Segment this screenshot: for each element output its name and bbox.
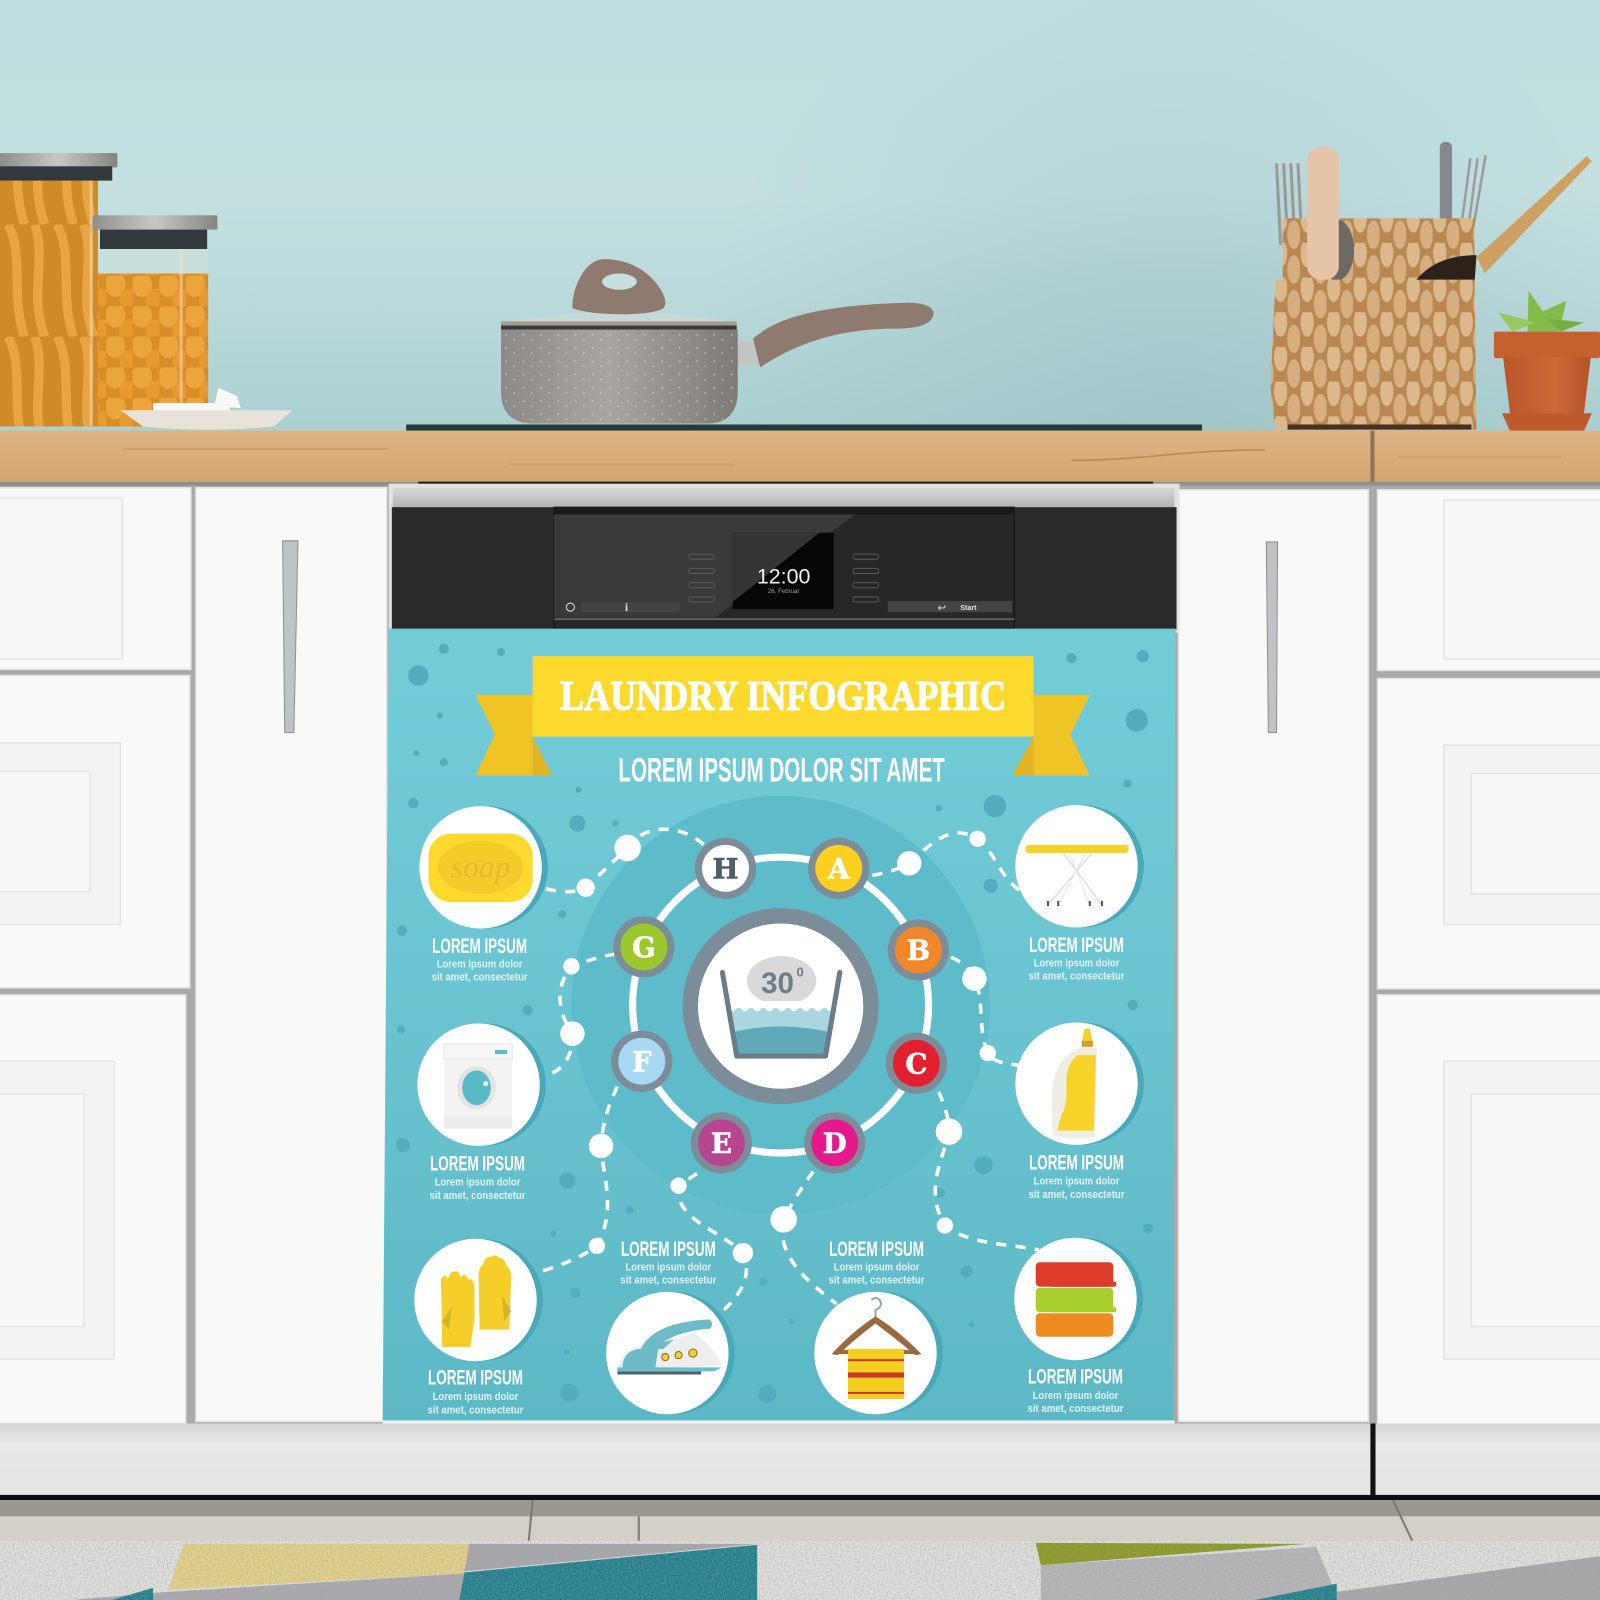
item: clothes iron: LOREM IPSUM [621,1237,716,1261]
item: towel on hanger: LOREM IPSUM [829,1237,924,1261]
dashed connectors [541,829,1039,1311]
item: ironing board: LOREM IPSUM [1029,933,1124,957]
subtitle: LOREM IPSUM DOLOR SIT AMET [618,752,945,790]
jars of pasta [0,153,217,427]
item: towel on hanger: sit amet, consectetur [829,1275,924,1287]
item: washing machine: sit amet, consectetur [430,1190,526,1202]
item: rubber gloves: Lorem ipsum dolor [433,1391,518,1403]
countertop [0,431,1600,488]
node G: G [632,932,656,964]
utensil basket [1270,142,1592,430]
infographic panel [383,629,1176,1423]
background dots [396,644,1153,1403]
item: clothes iron: Lorem ipsum dolor [626,1261,711,1273]
item: washing machine: Lorem ipsum dolor [435,1177,520,1189]
cabinets [0,486,1600,1424]
wash basin [722,972,840,1056]
item: detergent bottle: sit amet, consectetur [1029,1189,1124,1201]
clock display: 12:00 [757,565,811,589]
induction hob [406,424,1202,431]
node C [886,1033,947,1094]
item: towel on hanger [814,1237,943,1414]
wall [0,0,1600,434]
node A [808,838,869,899]
item: folded towels [1014,1238,1143,1415]
connector ring [633,857,929,1153]
potted succulent [1494,291,1600,432]
cabinet handle right [1266,542,1278,733]
connector nodes [560,831,996,1263]
item: folded towels: Lorem ipsum dolor [1033,1390,1118,1402]
floor [0,1500,1600,1543]
item: clothes iron: sit amet, consectetur [620,1275,716,1287]
node B: B [907,935,930,967]
item: washing machine: LOREM IPSUM [430,1151,525,1175]
clock display: 26. Februar [768,588,799,595]
item: folded towels: sit amet, consectetur [1028,1403,1123,1415]
node F: F [632,1046,652,1078]
node D: D [823,1128,847,1160]
title banner [476,656,1090,776]
item: rubber gloves [414,1239,543,1416]
item: soap: soap [451,850,510,885]
temperature badge: 0 [796,965,804,980]
item: ironing board: Lorem ipsum dolor [1034,957,1119,969]
rug [0,1541,1600,1600]
item: washing machine [417,1023,546,1202]
node A: A [827,854,850,886]
letter nodes [611,838,949,1173]
node C: C [905,1048,927,1080]
node G [613,916,674,978]
item: folded towels: LOREM IPSUM [1028,1365,1123,1389]
dishwasher control panel [389,484,1180,633]
clock display [733,533,834,609]
node E: E [711,1128,732,1160]
node B [888,919,949,981]
item: detergent bottle: Lorem ipsum dolor [1034,1176,1119,1188]
cabinet handle left [283,541,298,733]
dishwasher control panel: Start [960,604,977,612]
temperature badge: 30 [761,967,794,1000]
item: soap: Lorem ipsum dolor [437,958,522,970]
title banner: LAUNDRY INFOGRAPHIC [560,674,1006,720]
node F [611,1031,672,1092]
item: ironing board [1015,805,1144,983]
temperature badge [747,956,816,1005]
node D [804,1112,865,1173]
central disc [571,796,990,1214]
node E [691,1112,752,1173]
node H: H [712,854,739,886]
dishwasher control panel: i [625,602,628,614]
item: rubber gloves: LOREM IPSUM [428,1366,523,1390]
plinth [0,1423,1600,1500]
item: detergent bottle [1015,1022,1144,1201]
saucepan [501,259,934,423]
node H [695,838,756,899]
item: soap: LOREM IPSUM [432,934,527,958]
item: clothes iron [606,1237,735,1414]
item: ironing board: sit amet, consectetur [1029,971,1124,983]
item: detergent bottle: LOREM IPSUM [1029,1150,1124,1174]
item: soap: sit amet, consectetur [432,972,528,984]
dishwasher control panel: ↩ [938,603,946,614]
item: rubber gloves: sit amet, consectetur [428,1404,523,1416]
item: towel on hanger: Lorem ipsum dolor [834,1261,919,1273]
centre wash symbol [683,908,879,1104]
plate of sugar [120,388,293,430]
item: soap [419,806,548,984]
